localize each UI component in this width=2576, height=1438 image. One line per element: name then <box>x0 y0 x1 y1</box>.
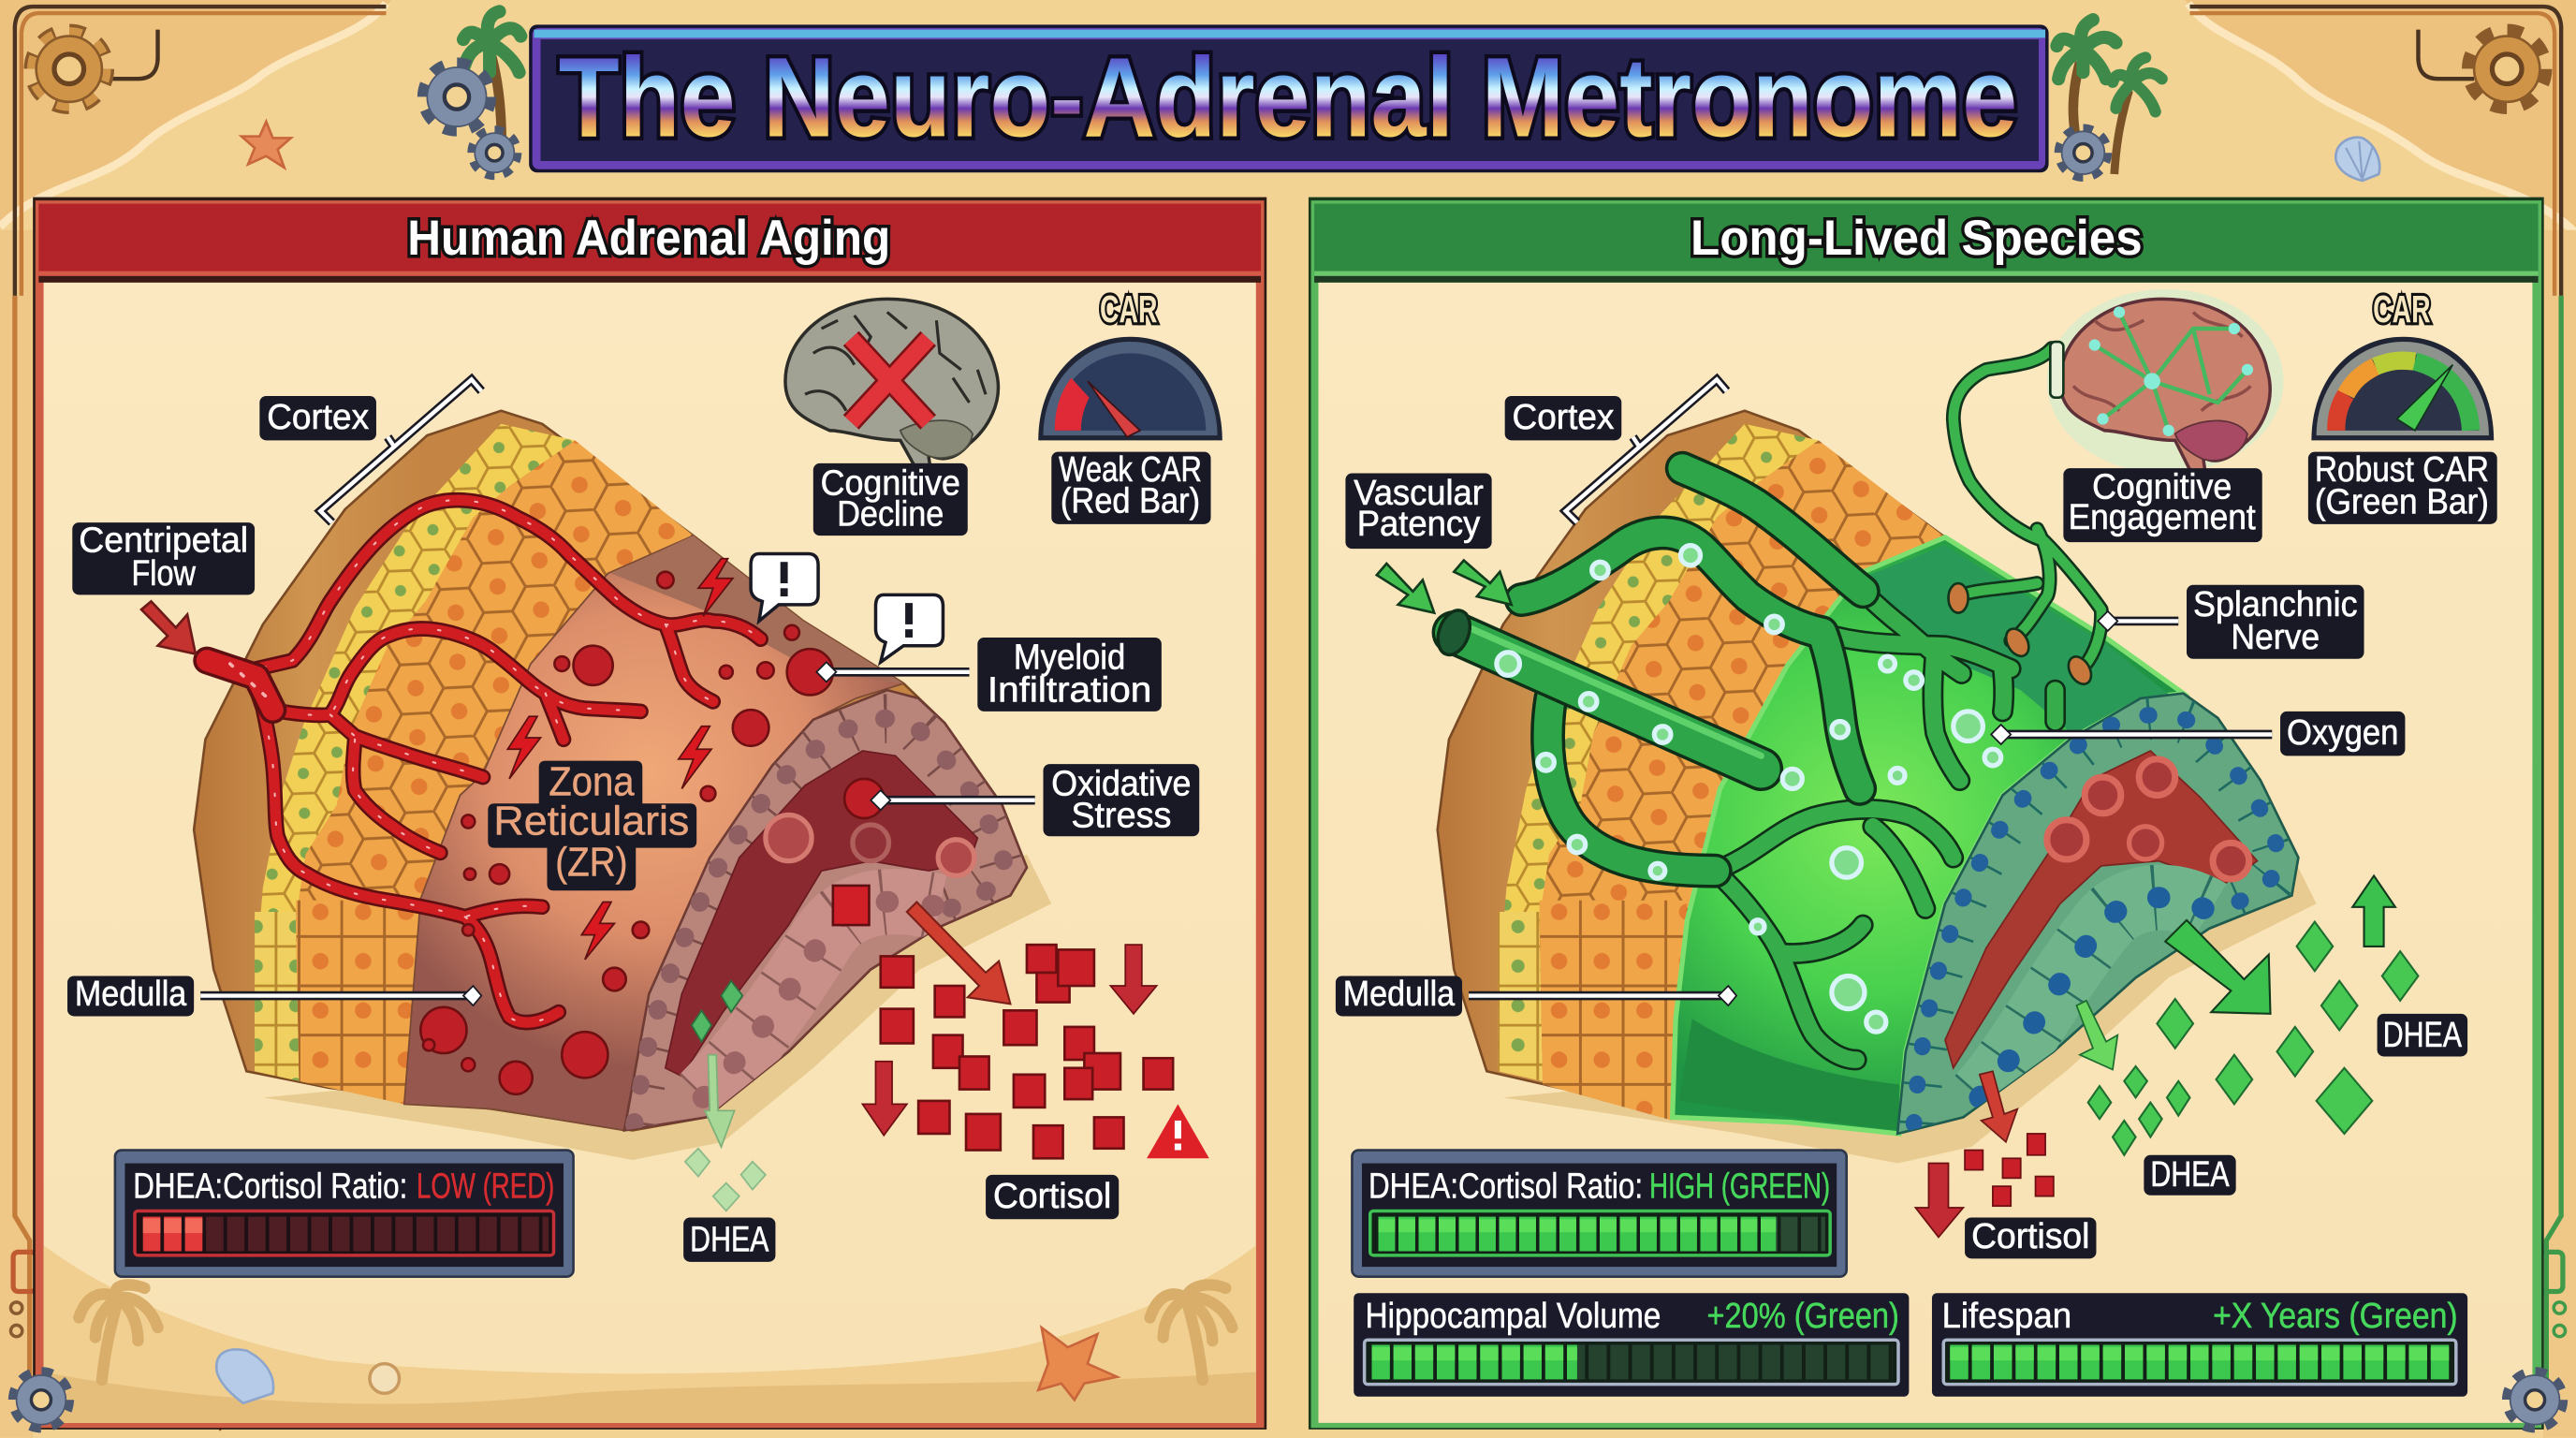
label: dhea: DHEA <box>2383 1015 2463 1054</box>
title text: The Neuro-Adrenal Metronome <box>559 34 2017 161</box>
cortex bracket right <box>1566 379 1727 522</box>
label: cortisol: Cortisol <box>993 1176 1111 1215</box>
arrows: vascular flow <box>1377 560 1512 613</box>
pointer and label: oxygen <box>1991 712 2405 756</box>
arrow: dhea up <box>2352 875 2395 946</box>
icon: palm trees top right <box>2056 20 2162 174</box>
dhea diamonds faint <box>685 1149 766 1211</box>
medulla ring <box>1897 694 2298 1134</box>
ratio gauge: low: LOW (RED) <box>417 1166 554 1205</box>
icon: healthy brain <box>2047 289 2284 479</box>
arrow: dhea large <box>2165 920 2271 1014</box>
icon: slate gears by title left <box>427 67 514 172</box>
lightning bolts <box>507 559 733 960</box>
cells on medulla: diamonds and cortisol <box>722 981 742 1012</box>
label: cognitive decline: Decline <box>837 494 944 534</box>
green zona reticularis <box>1673 537 2183 1134</box>
gear lower right <box>2510 1375 2559 1425</box>
dhea diamonds <box>2088 922 2418 1155</box>
panel header <box>38 204 1261 283</box>
zona glomerulosa yellow upper <box>255 424 575 1081</box>
vessels: red arteries <box>207 500 761 1022</box>
pointer and label: medulla: Medulla <box>1343 974 1455 1013</box>
speech bubbles <box>751 553 943 662</box>
panel body <box>1318 283 2532 1423</box>
medulla ring <box>624 690 1027 1130</box>
icon: starfish top left <box>242 122 291 168</box>
label: weak car: (Red Bar) <box>1061 481 1200 521</box>
pointer and label: medulla <box>67 974 481 1016</box>
dark green area under nerve <box>1856 546 2172 734</box>
label: cortex: Cortex <box>267 397 369 436</box>
arrow: weak dhea <box>705 1055 735 1147</box>
organ shadow <box>1503 855 2317 1164</box>
zona glomerulosa yellow <box>1499 424 1819 1081</box>
arrow: cortisol down 1 <box>1110 945 1157 1014</box>
label: cognitive engagement: Engagement <box>2069 497 2256 536</box>
gauge: robust car <box>2311 337 2494 440</box>
label: zona reticularis: (ZR) <box>555 839 627 885</box>
pointer and label: splanchnic nerve <box>2098 584 2364 659</box>
ratio gauge: low <box>115 1151 574 1277</box>
vessels: green patent vessels <box>1432 468 2056 1060</box>
icon: gold gear top right <box>2472 35 2541 104</box>
arrow: cortisol down <box>1915 1164 1963 1238</box>
ratio gauge: high: HIGH (GREEN) <box>1649 1166 1830 1205</box>
panel: human adrenal aging <box>17 198 1266 1430</box>
label: car: CAR <box>1100 287 1157 330</box>
label: car: CAR <box>2373 287 2431 330</box>
arrow: centripetal flow <box>141 601 196 654</box>
label: vascular patency <box>1345 473 1492 549</box>
nerve synapse endings <box>1949 583 2096 688</box>
metric: hippocampal volume: +20% (Green) <box>1707 1296 1899 1335</box>
pointer and label: myeloid infiltration: Myeloid <box>1014 637 1125 676</box>
panel header: Long-Lived Species <box>1690 211 2143 266</box>
ratio gauge: low: DHEA:Cortisol Ratio: <box>133 1166 407 1205</box>
nerve and brain <box>1949 289 2284 688</box>
label: vascular patency: Vascular <box>1354 473 1484 512</box>
label: zona reticularis: Reticularis <box>493 799 689 844</box>
icon: palm tree top left <box>463 11 520 165</box>
label: centripetal flow <box>72 521 255 594</box>
gears on lower frame <box>17 1375 66 1425</box>
arrow: dhea small <box>2076 1001 2117 1070</box>
cortex bracket <box>320 379 481 522</box>
label: robust car <box>2308 449 2497 524</box>
panel header <box>1314 204 2539 283</box>
pointer and label: oxidative stress: Oxidative <box>1051 763 1191 802</box>
label: robust car: (Green Bar) <box>2315 481 2489 521</box>
label: cortex: Cortex <box>1513 397 1615 436</box>
label: zona reticularis <box>488 758 696 890</box>
ratio gauge: high <box>1352 1151 1847 1277</box>
cortisol cluster <box>881 945 1173 1158</box>
label: dhea: DHEA <box>690 1219 769 1258</box>
pointer and label: oxidative stress: Stress <box>1071 796 1171 835</box>
adrenal cross-section: long-lived <box>1432 411 2317 1164</box>
oxygen bubbles <box>1497 546 2001 1032</box>
title banner <box>529 24 2049 172</box>
label: cognitive decline: Cognitive <box>821 462 960 502</box>
panel body <box>44 283 1256 1423</box>
label: cognitive decline <box>813 462 968 536</box>
label: centripetal flow: Flow <box>131 553 197 593</box>
label: centripetal flow: Centripetal <box>79 521 248 560</box>
icon: warning triangle <box>1147 1104 1209 1158</box>
beach inside panel <box>44 1245 1256 1423</box>
zona reticularis <box>404 536 903 1130</box>
pointer and label: splanchnic nerve: Splanchnic <box>2193 584 2358 624</box>
pointer and label: myeloid infiltration: Infiltration <box>988 669 1151 709</box>
ratio gauge: high: DHEA:Cortisol Ratio: <box>1368 1166 1643 1205</box>
label: weak car: Weak CAR <box>1059 449 1202 489</box>
arrow: cortisol small <box>1980 1071 2017 1142</box>
gauge: weak car <box>1038 337 1222 440</box>
organ shadow <box>263 855 1051 1160</box>
pointer and label: myeloid infiltration <box>816 637 1162 712</box>
label: dhea: DHEA <box>2150 1154 2230 1194</box>
label: weak car <box>1051 449 1211 524</box>
label: cognitive engagement <box>2063 467 2262 542</box>
capsule <box>194 411 1027 1130</box>
capsule <box>1438 411 2298 1134</box>
myeloid cell clusters <box>420 572 884 1094</box>
metric: lifespan <box>1932 1293 2467 1397</box>
pointer and label: oxidative stress <box>871 763 1199 836</box>
label: cognitive engagement: Cognitive <box>2092 467 2232 506</box>
label: cortisol: Cortisol <box>1971 1216 2089 1255</box>
pointer and label: medulla <box>1336 974 1736 1016</box>
cortisol small squares <box>1965 1134 2054 1206</box>
zona fasciculata orange <box>1540 440 1945 1117</box>
arrow: cortisol down 2 <box>862 1062 907 1136</box>
label: zona reticularis: Zona <box>549 758 635 804</box>
arrow: cortisol release large <box>907 902 1010 1004</box>
icon: shell top right <box>2335 138 2379 181</box>
icon: slate gear by title right <box>2062 131 2104 174</box>
metric: hippocampal volume: Hippocampal Volume <box>1365 1296 1661 1335</box>
metric: lifespan: +X Years (Green) <box>2213 1296 2458 1335</box>
pointer and label: splanchnic nerve: Nerve <box>2231 617 2320 656</box>
label: vascular patency: Patency <box>1357 504 1480 543</box>
label: robust car: Robust CAR <box>2315 449 2489 489</box>
zona fasciculata orange <box>296 440 694 1104</box>
pointer and label: medulla: Medulla <box>75 974 186 1013</box>
icon: declining brain <box>785 299 998 477</box>
metric: hippocampal volume <box>1354 1293 1909 1397</box>
panel header: Human Adrenal Aging <box>407 211 890 266</box>
pointer and label: oxygen: Oxygen <box>2287 712 2398 752</box>
icon: gold gear top left <box>35 35 104 104</box>
panel: long-lived species <box>1309 198 2559 1430</box>
metric: lifespan: Lifespan <box>1942 1296 2071 1335</box>
adrenal cross-section: aging <box>194 411 1051 1160</box>
